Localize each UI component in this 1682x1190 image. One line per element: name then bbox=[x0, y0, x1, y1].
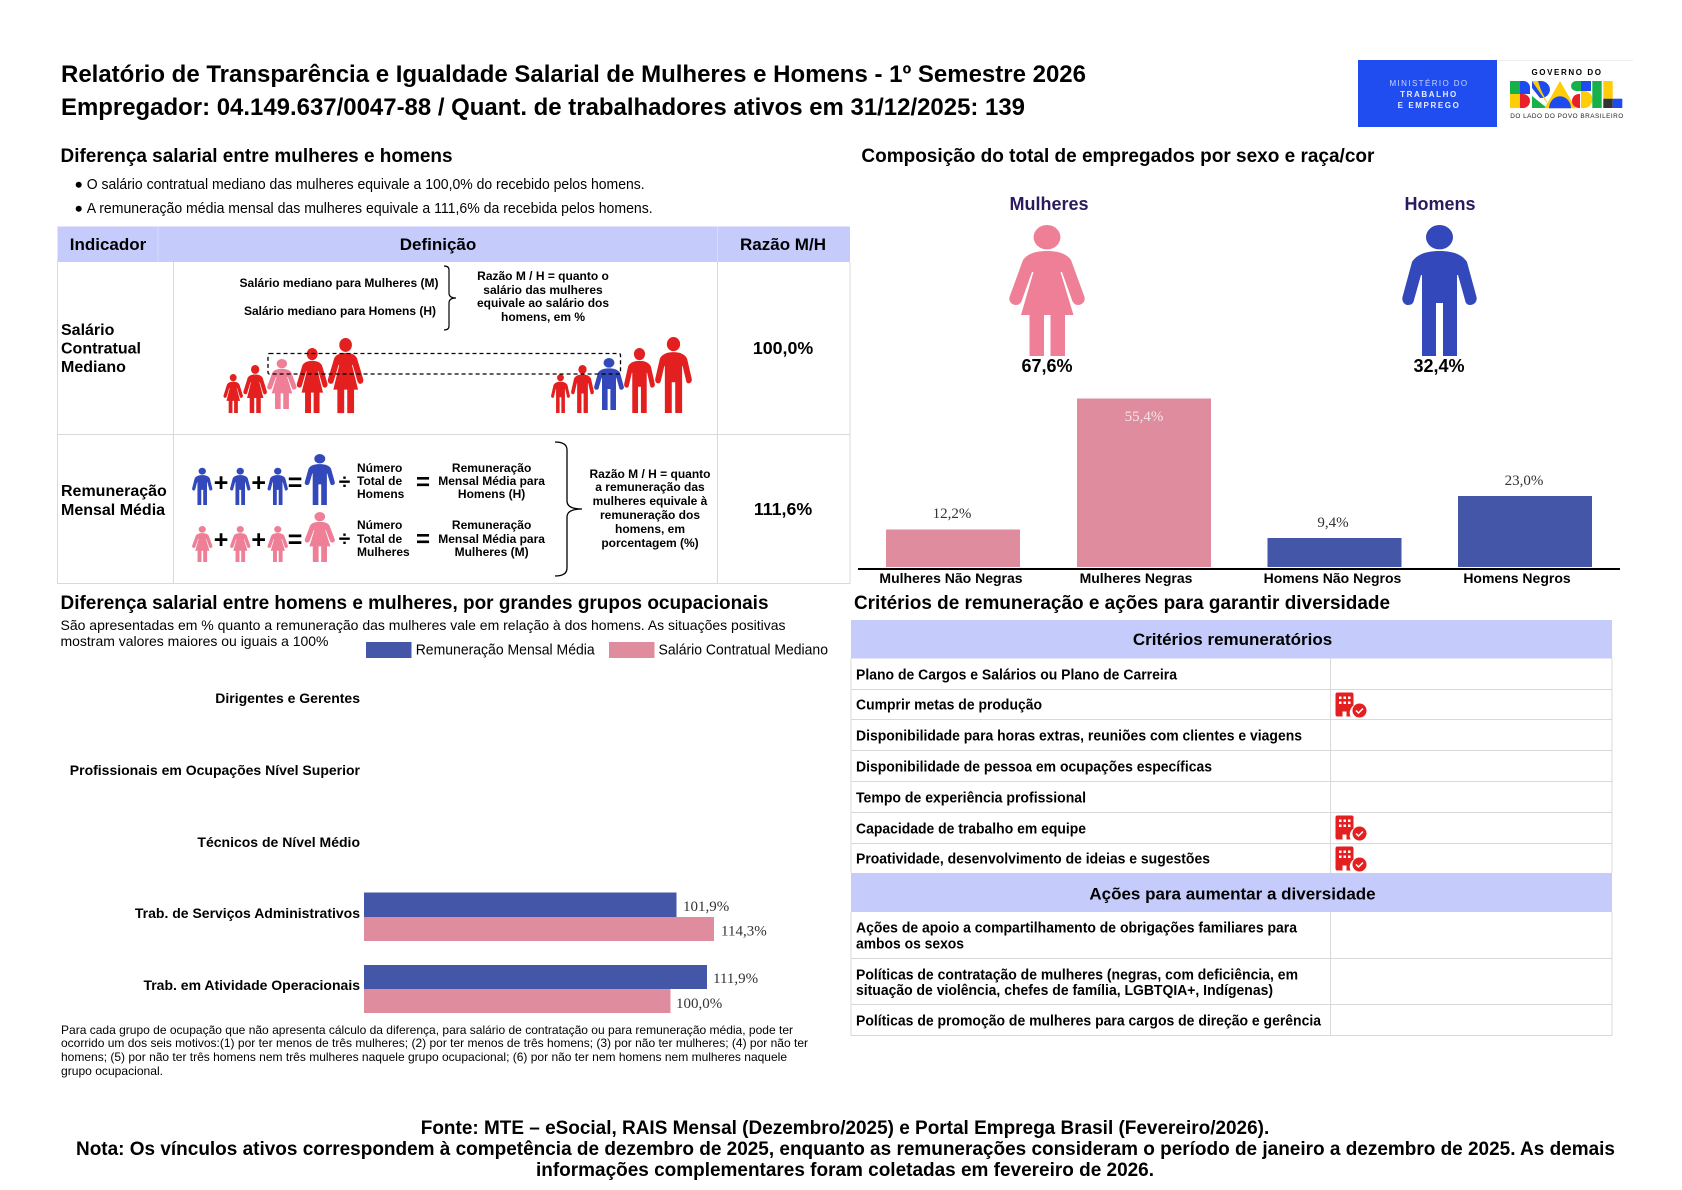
value: homens: 32,4% bbox=[1413, 356, 1465, 376]
criteria rows: Capacidade de trabalho em equipe bbox=[856, 822, 1086, 838]
row label: Mediano bbox=[61, 359, 126, 376]
bar: homens não negros: Homens Não Negros bbox=[1264, 570, 1402, 586]
icon: company check, metas de produção bbox=[1336, 692, 1366, 718]
text block: chart explanation: mostram valores maiores ou iguais a 100% bbox=[60, 633, 328, 649]
text block: chart explanation bbox=[60, 617, 786, 649]
bar: homens não negros: 9,4% bbox=[1317, 515, 1349, 531]
formula: men: Remuneração bbox=[452, 461, 531, 475]
criteria rows: Disponibilidade para horas extras, reuniões com clientes e viagens bbox=[856, 728, 1302, 744]
criteria rows: Proatividade, desenvolvimento de ideias e sugestões bbox=[856, 852, 1210, 868]
bar: mulheres negras: 55,4% bbox=[1125, 409, 1163, 425]
formula: women: + bbox=[251, 526, 266, 554]
brace and ratio definition: homens, em bbox=[615, 522, 685, 536]
table header: Definição bbox=[400, 235, 476, 254]
formula: women: ÷ bbox=[339, 528, 351, 551]
action rows: Políticas de contratação de mulheres (negras, com deficiência, em bbox=[856, 968, 1298, 984]
logo: Governo do Brasil: GOVERNO DO bbox=[1531, 68, 1603, 77]
formula: men: Número bbox=[357, 461, 402, 475]
action rows: ambos os sexos bbox=[856, 936, 964, 952]
icon: company check, trabalho em equipe bbox=[1336, 816, 1366, 840]
formula: men: ÷ bbox=[339, 471, 351, 494]
icon: man bbox=[1402, 225, 1477, 356]
criteria rows: Tempo de experiência profissional bbox=[856, 790, 1086, 806]
row label bbox=[61, 483, 167, 519]
salary definitions and brace: Razão M / H = quanto o bbox=[477, 269, 609, 283]
category: atividade operacionais bbox=[143, 965, 758, 1013]
formula: women: Mensal Média para bbox=[438, 532, 545, 546]
heading: composição: Composição do total de empregados por sexo e raça/cor bbox=[861, 145, 1375, 167]
heading: diferença salarial: Diferença salarial entre mulheres e homens bbox=[60, 145, 453, 167]
formula: men: Mensal Média para bbox=[438, 474, 545, 488]
text block: bullets: A remuneração média mensal das mulheres equivale a 111,6% da recebida pelos homens. bbox=[87, 201, 653, 217]
salary definitions and brace: salário das mulheres bbox=[483, 283, 603, 297]
formula: women: Total de bbox=[357, 532, 402, 546]
bar: mulheres negras bbox=[1077, 398, 1211, 586]
category: dirigentes e gerentes: Dirigentes e Gerentes bbox=[215, 690, 360, 706]
logo: Ministério do Trabalho e Emprego bbox=[1358, 60, 1497, 127]
category: atividade operacionais: 111,9% bbox=[713, 971, 758, 987]
row label bbox=[61, 322, 141, 376]
formula: men: Homens bbox=[357, 487, 405, 501]
heading: grupos ocupacionais: Diferença salarial entre homens e mulheres, por grandes grupos ocupacionais bbox=[60, 592, 769, 614]
action rows: Ações de apoio a compartilhamento de obrigações familiares para bbox=[856, 920, 1298, 936]
title: Relatório de Transparência e Igualdade Salarial de Mulheres e Homens - 1º Semestre 2026 bbox=[61, 61, 1086, 88]
icon: woman bbox=[1009, 225, 1085, 356]
row label: Salário bbox=[61, 322, 115, 339]
header: ações para aumentar a diversidade: Ações para aumentar a diversidade bbox=[1089, 884, 1376, 904]
footer: fonte e nota bbox=[76, 1118, 1615, 1181]
criteria rows: Disponibilidade de pessoa em ocupações específicas bbox=[856, 760, 1212, 776]
bar: mulheres não negras: Mulheres Não Negras bbox=[879, 570, 1023, 586]
footer: fonte e nota: Nota: Os vínculos ativos correspondem à competência de dezembro de 2025, enquanto as remunerações consideram o período de janeiro a dezembro de 2025. As demais bbox=[76, 1139, 1615, 1160]
header: critérios remuneratórios bbox=[851, 620, 1612, 658]
salary definitions and brace: Salário mediano para Homens (H) bbox=[244, 304, 436, 318]
text block: footnote: ocorrido um dos seis motivos:(1) por ter menos de três mulheres; (2) por ter menos de três homens; (3) por não ter mulheres; (4) por não ter bbox=[61, 1036, 808, 1050]
bar: mulheres não negras bbox=[879, 506, 1023, 586]
icon: row of women bbox=[223, 338, 363, 413]
brace and ratio definition: Razão M / H = quanto bbox=[589, 467, 711, 481]
header: ações para aumentar a diversidade bbox=[851, 873, 1612, 912]
heading: critérios: Critérios de remuneração e ações para garantir diversidade bbox=[854, 592, 1390, 614]
header: critérios remuneratórios: Critérios remuneratórios bbox=[1133, 630, 1332, 649]
bar: mulheres não negras: 12,2% bbox=[933, 506, 971, 522]
legend bbox=[366, 642, 828, 658]
salary definitions and brace: Salário mediano para Mulheres (M) bbox=[240, 276, 438, 290]
action rows: Políticas de promoção de mulheres para cargos de direção e gerência bbox=[856, 1014, 1322, 1030]
panel: criteria table bbox=[851, 620, 1612, 1036]
footer: fonte e nota: informações complementares foram coletadas em fevereiro de 2026. bbox=[536, 1160, 1154, 1181]
text block: footnote: grupo ocupacional. bbox=[61, 1064, 163, 1078]
row label: Mensal Média bbox=[61, 502, 165, 519]
text block: chart explanation: São apresentadas em % quanto a remuneração das mulheres vale em relação à dos homens. As situações positivas bbox=[60, 617, 786, 633]
salary definitions and brace: homens, em % bbox=[501, 310, 585, 324]
salary definitions and brace bbox=[240, 266, 609, 330]
logo: Governo do Brasil bbox=[1497, 60, 1633, 120]
table header: Razão M/H bbox=[740, 235, 826, 254]
logo: Ministério do Trabalho e Emprego: TRABALHO bbox=[1400, 90, 1458, 99]
bar chart: sexo e raça/cor bbox=[858, 398, 1620, 586]
value: salário contratual mediano: 100,0% bbox=[753, 338, 813, 358]
logo: Governo do Brasil: DO LADO DO POVO BRASILEIRO bbox=[1510, 113, 1624, 120]
label: mulheres: Mulheres bbox=[1009, 194, 1089, 214]
title: Empregador: 04.149.637/0047-88 / Quant. de trabalhadores ativos em 31/12/2025: 139 bbox=[61, 94, 1025, 121]
category: atividade operacionais: Trab. em Atividade Operacionais bbox=[143, 977, 360, 993]
formula: women: Número bbox=[357, 518, 402, 532]
formula: women: = bbox=[288, 526, 302, 554]
category: serviços administrativos: 114,3% bbox=[721, 924, 767, 940]
formula: women bbox=[192, 512, 545, 562]
value: remuneração mensal média: 111,6% bbox=[754, 499, 812, 519]
brace and ratio definition: porcentagem (%) bbox=[601, 536, 699, 550]
formula: women: + bbox=[214, 526, 228, 554]
row label: Contratual bbox=[61, 340, 141, 358]
logo: Ministério do Trabalho e Emprego: MINISTÉRIO DO bbox=[1389, 79, 1469, 88]
salary definitions and brace: equivale ao salário dos bbox=[477, 296, 609, 310]
text block: bullets: O salário contratual mediano das mulheres equivale a 100,0% do recebido pelos homens. bbox=[87, 177, 645, 193]
action rows bbox=[856, 920, 1322, 1030]
category: serviços administrativos: Trab. de Serviços Administrativos bbox=[135, 905, 360, 921]
title bbox=[61, 61, 1086, 121]
brace and ratio definition: mulheres equivale à bbox=[593, 494, 708, 508]
criteria rows: Cumprir metas de produção bbox=[856, 698, 1042, 714]
brace and ratio definition: a remuneração das bbox=[595, 480, 705, 494]
formula: men: = bbox=[288, 469, 302, 497]
criteria rows bbox=[856, 668, 1302, 868]
row: remuneração mensal média bbox=[61, 442, 812, 576]
text block: footnote bbox=[61, 1023, 808, 1078]
dashed median connector bbox=[268, 354, 620, 374]
table header bbox=[58, 226, 850, 262]
row: salário contratual mediano bbox=[61, 266, 813, 413]
icon: row of men bbox=[551, 337, 692, 413]
category: serviços administrativos bbox=[135, 892, 767, 941]
row label: Remuneração bbox=[61, 483, 167, 500]
bar chart: grupos ocupacionais bbox=[70, 690, 767, 1013]
text block: footnote: homens; (5) por não ter três homens nem três mulheres naquele grupo ocupacional; (6) por não ter nem homens nem mulheres naquele bbox=[61, 1050, 787, 1064]
text block: bullets bbox=[76, 177, 653, 217]
bar: homens negros: 23,0% bbox=[1505, 473, 1543, 489]
label: homens: Homens bbox=[1404, 194, 1476, 214]
formula: men: Total de bbox=[357, 474, 402, 488]
category: profissionais: Profissionais em Ocupações Nível Superior bbox=[70, 762, 361, 778]
panel: composition by sex bbox=[1009, 194, 1477, 376]
brace and ratio definition bbox=[555, 442, 711, 576]
legend: Remuneração Mensal Média bbox=[416, 642, 595, 658]
logo: Ministério do Trabalho e Emprego: E EMPREGO bbox=[1398, 101, 1460, 110]
formula: men bbox=[192, 454, 545, 505]
icon: company check, proatividade bbox=[1336, 846, 1366, 872]
bar: mulheres negras: Mulheres Negras bbox=[1080, 570, 1193, 586]
value: mulheres: 67,6% bbox=[1021, 356, 1073, 376]
formula: men: = bbox=[416, 469, 430, 496]
action rows: situação de violência, chefes de família, LGBTQIA+, Indígenas) bbox=[856, 983, 1273, 999]
brace and ratio definition: remuneração dos bbox=[600, 508, 700, 522]
formula: men: + bbox=[214, 469, 228, 497]
formula: women: Mulheres bbox=[357, 545, 410, 559]
formula: women: Mulheres (M) bbox=[455, 545, 529, 559]
bar: homens não negros bbox=[1264, 515, 1402, 586]
bar: homens negros bbox=[1458, 473, 1592, 586]
category: técnicos: Técnicos de Nível Médio bbox=[197, 834, 360, 850]
table header: Indicador bbox=[70, 235, 147, 254]
text block: footnote: Para cada grupo de ocupação que não apresenta cálculo da diferença, para salário de contratação ou para remuneração média, pode ter bbox=[61, 1023, 793, 1037]
formula: men: Homens (H) bbox=[458, 487, 525, 501]
formula: women: = bbox=[416, 526, 430, 553]
panel: indicator table bbox=[58, 226, 850, 584]
category: atividade operacionais: 100,0% bbox=[676, 996, 722, 1012]
category: serviços administrativos: 101,9% bbox=[683, 899, 729, 915]
formula: women: Remuneração bbox=[452, 518, 531, 532]
legend: Salário Contratual Mediano bbox=[658, 642, 828, 658]
criteria rows: Plano de Cargos e Salários ou Plano de Carreira bbox=[856, 668, 1178, 684]
footer: fonte e nota: Fonte: MTE – eSocial, RAIS Mensal (Dezembro/2025) e Portal Emprega Brasil (Fevereiro/2026). bbox=[421, 1118, 1269, 1139]
formula: men: + bbox=[251, 469, 266, 497]
bar: homens negros: Homens Negros bbox=[1463, 570, 1571, 586]
